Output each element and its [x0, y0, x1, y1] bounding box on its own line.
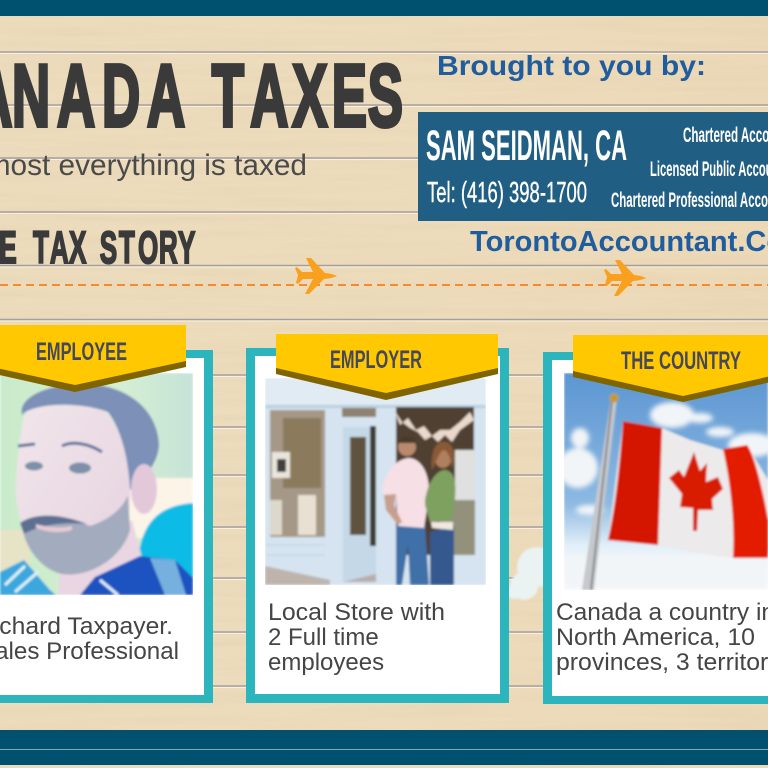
caption: employer: 2 Full time — [268, 624, 379, 651]
ribbon: employer — [276, 334, 498, 400]
photo: employee portrait — [0, 373, 193, 595]
icon: airplane left — [295, 258, 337, 294]
brought to you by: Brought to you by: — [437, 50, 706, 81]
photo: canadian flag — [558, 373, 768, 590]
top band — [0, 0, 768, 16]
caption: the country: Canada a country in — [556, 599, 768, 626]
bottom band — [0, 730, 768, 765]
ribbon: the country — [573, 335, 768, 402]
dashed flight path — [0, 284, 768, 286]
caption: the country — [556, 599, 768, 676]
store couple — [396, 525, 429, 585]
panel: employer — [246, 334, 509, 703]
panel: employee — [0, 325, 213, 703]
caption: employee — [0, 613, 179, 665]
photo: local store — [265, 378, 486, 585]
ribbon: employer: EMPLOYER — [330, 346, 422, 374]
icon: airplane right — [604, 260, 646, 296]
panel: the country — [543, 335, 768, 704]
decorative cloud between panels — [507, 547, 557, 600]
accountant contact box — [418, 112, 768, 221]
ribbon: employee: EMPLOYEE — [36, 338, 127, 366]
caption: the country: North America, 10 — [556, 624, 755, 651]
ribbon: employee — [0, 325, 186, 392]
caption: employer: Local Store with — [268, 599, 445, 626]
caption: employer — [268, 599, 445, 676]
caption: employer: employees — [268, 649, 384, 676]
telephone: Tel: (416) 398-1700 — [427, 177, 587, 209]
